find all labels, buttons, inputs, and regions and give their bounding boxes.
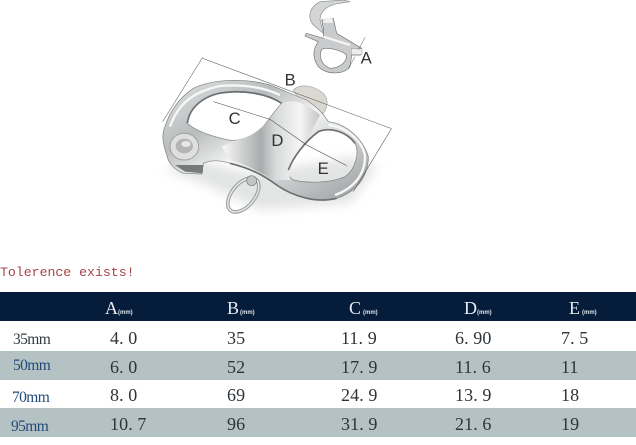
row 50mm: 50mm: [13, 357, 51, 374]
soft floor shadow: [167, 157, 377, 210]
product photo: snap shackle with dimension labels: [163, 0, 392, 218]
shackle rim highlights: [170, 85, 365, 195]
pivot pin top: [293, 86, 327, 113]
row 35mm: [13, 328, 588, 348]
row 95mm: 31. 9: [341, 414, 378, 434]
dimension line E: [307, 145, 347, 166]
row 70mm: 69: [227, 385, 245, 405]
column headers: (mm): [240, 310, 255, 316]
row 50mm: 6. 0: [110, 357, 137, 377]
column headers: E: [569, 298, 580, 318]
shackle inner dark edges: [187, 92, 355, 200]
dimension line D: [270, 119, 307, 145]
row 95mm: 96: [227, 414, 245, 434]
column headers: A: [105, 298, 118, 318]
row 95mm: 19: [561, 414, 579, 434]
row 50mm: [13, 357, 579, 377]
row 50mm: 11. 6: [455, 357, 491, 377]
split ring: [222, 172, 265, 218]
column headers: [105, 298, 597, 318]
column headers: B: [227, 298, 239, 318]
row 35mm: 11. 9: [341, 328, 377, 348]
jaw slot: [175, 165, 203, 173]
row 50mm: 52: [227, 357, 245, 377]
row 35mm: 35: [227, 328, 245, 348]
row 35mm: 4. 0: [110, 328, 137, 348]
row 50mm: 11: [561, 357, 579, 377]
column headers: (mm): [118, 310, 133, 316]
label E: E: [318, 159, 329, 178]
row 35mm: 7. 5: [561, 328, 588, 348]
row 70mm: 18: [561, 385, 579, 405]
row 50mm: 17. 9: [341, 357, 378, 377]
row 50mm background: [0, 351, 636, 380]
bolt head: [170, 133, 199, 160]
row 70mm: 13. 9: [455, 385, 492, 405]
row 95mm background: [0, 408, 636, 437]
row 70mm: 8. 0: [110, 385, 137, 405]
small shackle detail: [305, 0, 365, 73]
row 35mm: 6. 90: [455, 328, 492, 348]
tolerance note: Tolerence exists!: [0, 265, 135, 280]
shackle body: [163, 80, 368, 200]
row 70mm: [12, 385, 579, 406]
row 95mm: 21. 6: [455, 414, 492, 434]
label C: C: [229, 109, 241, 128]
row 95mm: 10. 7: [110, 414, 146, 434]
row 35mm: 35mm: [13, 331, 51, 348]
table header row: [0, 292, 636, 321]
row 70mm: 24. 9: [341, 385, 378, 405]
label D: D: [271, 131, 283, 150]
size table: [0, 292, 636, 437]
column headers: (mm): [363, 310, 378, 316]
row 95mm: 95mm: [11, 418, 49, 435]
row 95mm: [11, 414, 579, 435]
label B: B: [285, 71, 296, 90]
column headers: C: [349, 298, 361, 318]
column headers: (mm): [477, 310, 492, 316]
dimension line B: [163, 57, 392, 192]
label A: A: [361, 49, 373, 68]
central plate highlight: [222, 101, 320, 180]
column headers: D: [464, 298, 477, 318]
dimension line C: [213, 102, 270, 119]
row 70mm: 70mm: [12, 389, 50, 406]
column headers: (mm): [582, 310, 597, 316]
